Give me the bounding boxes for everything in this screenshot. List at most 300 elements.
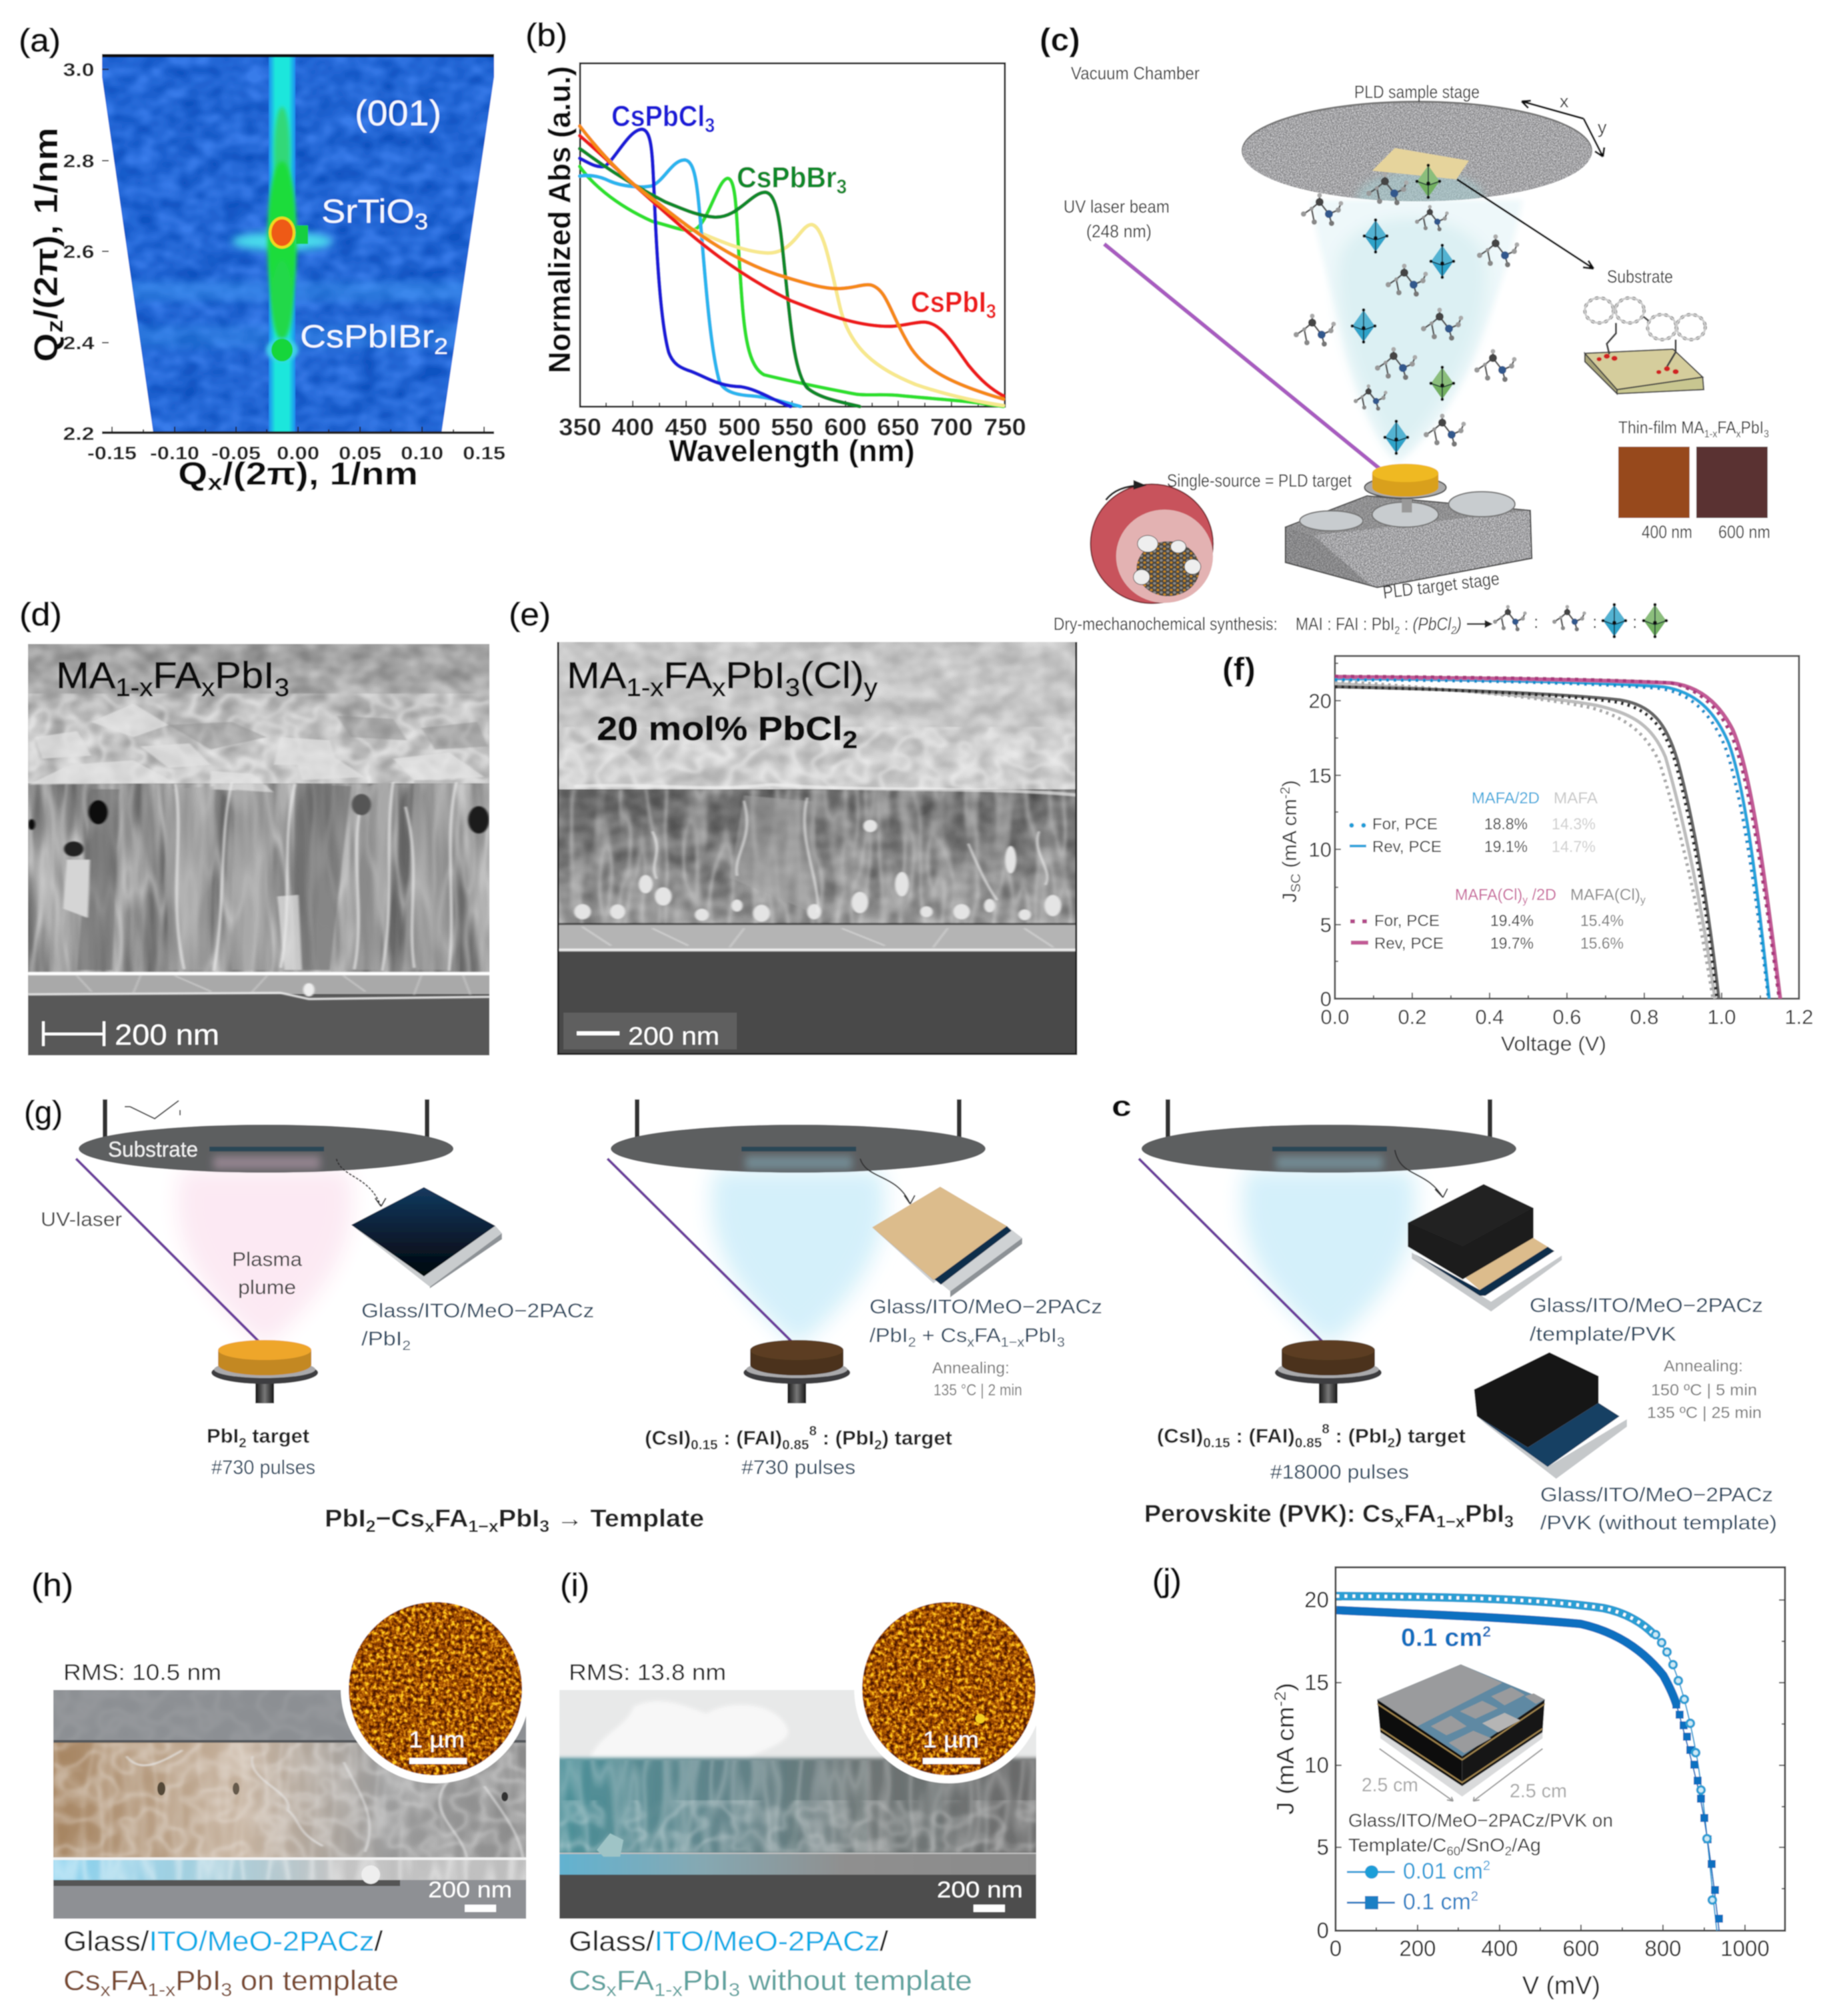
caption h: 1-x	[147, 1979, 175, 2000]
y ticks j: 10	[1304, 1753, 1329, 1777]
y ticks f: 0	[1320, 987, 1332, 1011]
axis title y f: SC	[1289, 873, 1304, 893]
y ticks f: 10	[1309, 838, 1332, 861]
x ticks f: 1.2	[1784, 1005, 1814, 1029]
title e: (Cl)	[800, 654, 864, 696]
title d: 1-x	[115, 674, 153, 702]
ticks b: 400	[611, 413, 654, 441]
step 1 labels: Plasma	[232, 1249, 302, 1271]
step 1 labels: target	[247, 1425, 309, 1447]
step 3 labels: : (FAI)	[1230, 1425, 1295, 1447]
ticks b: 600	[824, 413, 867, 441]
step 2 plume blue	[611, 1099, 986, 1343]
caption i: 1-x	[654, 1979, 683, 2000]
step 2 labels	[645, 1296, 1102, 1479]
step 2 labels: : (FAI)	[717, 1427, 782, 1449]
x ticks f: 0.8	[1630, 1005, 1659, 1029]
title e: 20 mol% PbCl	[597, 710, 817, 747]
thin-film samples: 400 nm	[1642, 522, 1692, 542]
legend f: For, PCE	[1372, 815, 1438, 833]
y ticks j: 5	[1317, 1835, 1329, 1859]
step 3 labels: /template/PVK	[1530, 1323, 1676, 1345]
caption i: x	[606, 1979, 617, 2000]
legend f: 15.4%	[1580, 912, 1624, 930]
panel i: SEM without template	[553, 1568, 1044, 2000]
template caption: PbI	[325, 1505, 363, 1532]
axis title y f: (mA cm	[1279, 799, 1301, 873]
step 3 labels: x	[1394, 1513, 1404, 1531]
dimension labels: 2.5 cm	[1362, 1775, 1418, 1796]
synthesis equation: :	[1592, 612, 1598, 632]
step 3 labels: Glass/ITO/MeO−2PACz	[1530, 1295, 1763, 1317]
axis title x a: Q	[178, 457, 203, 492]
SEM image e	[558, 642, 1081, 1054]
x ticks f	[1320, 1005, 1814, 1029]
axis title y f: J	[1279, 893, 1301, 903]
step 3 labels	[1144, 1295, 1777, 1534]
caption h: FA	[111, 1965, 147, 1996]
title d: 3	[275, 674, 289, 702]
synthesis equation: Dry-mechanochemical synthesis:	[1054, 614, 1278, 634]
ticks b: 450	[665, 413, 707, 441]
y ticks j: 0	[1317, 1918, 1329, 1943]
step 3 labels: Annealing:	[1664, 1357, 1743, 1375]
panel label g: (g)	[24, 1095, 63, 1131]
stage label and axes: y	[1598, 117, 1607, 137]
legend f: y	[1522, 895, 1528, 906]
legend f: 15.6%	[1580, 935, 1624, 953]
ticks b	[559, 413, 1026, 441]
frame b	[580, 63, 1005, 407]
legend f: 14.3%	[1552, 815, 1596, 833]
step 3 labels: 3	[1504, 1513, 1514, 1531]
step 2 labels: 0.85	[782, 1438, 809, 1453]
x ticks j: 600	[1562, 1936, 1600, 1961]
synthesis equation: :	[1632, 612, 1638, 632]
caption h: Cs	[63, 1965, 97, 1996]
synthesis equation: :	[1534, 612, 1539, 632]
step 1 labels: /PbI	[361, 1328, 397, 1350]
substrate callout: Substrate	[1607, 267, 1673, 287]
title e	[567, 654, 877, 753]
scale bar e	[577, 1023, 719, 1051]
step 2 labels: /PbI	[869, 1325, 905, 1347]
synthesis equation	[1054, 603, 1668, 639]
axis title y j: J (mA cm	[1272, 1715, 1299, 1815]
thin-film samples: PbI	[1741, 417, 1764, 437]
axis title x b: Wavelength (nm)	[669, 433, 915, 468]
x ticks j	[1330, 1936, 1770, 1961]
step 3 labels: /PVK (without template)	[1540, 1512, 1777, 1534]
synthesis equation: )	[1455, 614, 1462, 634]
panel label j: (j)	[1152, 1563, 1182, 1599]
legend f: y	[1640, 895, 1646, 906]
legend f: /2D	[1528, 886, 1556, 904]
legend j: 60	[1446, 1845, 1460, 1858]
legend f: 19.7%	[1490, 935, 1534, 953]
step 1 labels: plume	[238, 1277, 296, 1299]
title d: x	[201, 674, 215, 702]
vacuum chamber label: Vacuum Chamber	[1071, 63, 1200, 83]
laser label	[1064, 197, 1170, 241]
AFM inset i	[854, 1594, 1044, 1783]
title e: 2	[843, 726, 857, 753]
title e: x	[712, 674, 725, 702]
axis ticks a: -0.15	[87, 443, 137, 463]
step 2 labels: Annealing:	[932, 1359, 1010, 1377]
curve labels b: CsPbBr	[737, 161, 844, 194]
SEM image h	[53, 1690, 526, 1919]
RMS h: RMS: 10.5 nm	[63, 1660, 221, 1685]
plume c	[1311, 200, 1523, 463]
caption h: PbI	[175, 1965, 221, 1996]
step 3 labels: PbI	[1465, 1500, 1504, 1527]
scale bar i: 200 nm	[937, 1877, 1023, 1903]
caption i: FA	[617, 1965, 654, 1996]
panel label a: (a)	[19, 23, 61, 59]
dimension labels	[1362, 1775, 1567, 1802]
panel label e: (e)	[509, 597, 551, 633]
title e: y	[864, 674, 877, 702]
panel e: SEM cross-section with PbCl2	[509, 597, 1081, 1054]
step 3 labels: 8	[1322, 1422, 1330, 1437]
caption i	[569, 1925, 972, 2000]
step 3 labels: Perovskite (PVK): Cs	[1144, 1500, 1390, 1527]
step 1 labels: UV-laser	[41, 1209, 122, 1231]
AFM inset h	[341, 1594, 530, 1783]
annotations a	[300, 93, 448, 359]
step 2 labels: 0.15	[691, 1438, 717, 1453]
template caption: x	[425, 1517, 435, 1536]
legend f: 18.8%	[1484, 815, 1528, 833]
step 2 labels: 8	[809, 1424, 817, 1439]
step 2 labels: FA	[974, 1325, 1001, 1347]
axis ticks a: -0.10	[150, 443, 199, 463]
thin-film samples: Thin-film MA	[1618, 417, 1716, 437]
synthesis equation: (PbCl	[1413, 614, 1452, 634]
title e: 1-x	[626, 674, 663, 702]
legend j: 0.1 cm	[1403, 1889, 1471, 1915]
axis ticks a: 2.8	[63, 151, 95, 171]
panel label c: (c)	[1040, 23, 1080, 58]
step 1 labels: Glass/ITO/MeO−2PACz	[361, 1300, 594, 1322]
axis ticks a: 0.10	[401, 443, 443, 463]
SEM image d	[28, 644, 491, 1055]
caption h: Glass/ITO/MeO-2PACz /	[63, 1925, 383, 1957]
x ticks f: 0.6	[1552, 1005, 1582, 1029]
step 2 labels: ) target	[882, 1427, 952, 1449]
curves f	[1335, 676, 1780, 999]
axis title y j: -2	[1272, 1691, 1290, 1707]
axis ticks a: 3.0	[63, 59, 95, 80]
scale bar e: 200 nm	[628, 1023, 719, 1051]
stage label and axes	[1354, 82, 1607, 157]
x ticks j: 0	[1330, 1936, 1342, 1961]
panel label i: (i)	[560, 1568, 589, 1603]
scale bar d	[43, 1019, 219, 1051]
legend j: Glass/ITO/MeO−2PACz/PVK on	[1348, 1810, 1613, 1831]
x ticks j: 400	[1481, 1936, 1518, 1961]
panel c: PLD chamber schematic	[1040, 23, 1770, 639]
x ticks f: 0.2	[1398, 1005, 1427, 1029]
step 2 labels: 2	[908, 1335, 916, 1350]
annotations a: CsPbIBr	[300, 319, 419, 355]
legend f: MAFA/2D	[1472, 789, 1540, 807]
axis ticks a: 0.05	[339, 443, 381, 463]
synthesis equation: :	[1400, 614, 1413, 634]
legend f: 19.1%	[1484, 838, 1528, 856]
step 2 labels: + Cs	[916, 1325, 967, 1347]
step 3 labels: 2	[1388, 1436, 1395, 1451]
y ticks f: 15	[1309, 764, 1332, 787]
step 1 labels: PbI	[207, 1425, 238, 1447]
caption h: 3	[221, 1979, 232, 2000]
y ticks f	[1309, 689, 1332, 1011]
legend j: Template/C	[1348, 1835, 1443, 1855]
curve labels b: 3	[837, 176, 847, 198]
step 2 laser	[607, 1159, 796, 1346]
legend j: 2	[1471, 1889, 1478, 1904]
y ticks f: 20	[1309, 689, 1332, 713]
stage label and axes: x	[1560, 91, 1569, 111]
title e: PbI	[725, 654, 785, 696]
title d: PbI	[215, 654, 275, 696]
device cube inset	[1377, 1664, 1545, 1801]
panel b: absorbance chart	[525, 18, 1026, 468]
scale bar h: 200 nm	[428, 1877, 512, 1903]
legend f: MAFA	[1554, 789, 1598, 807]
axis title x a: x	[207, 470, 223, 495]
template caption: 2	[365, 1517, 375, 1536]
template caption: 3	[539, 1517, 549, 1536]
step 2 sample	[860, 1159, 1022, 1297]
target stage	[1280, 464, 1537, 590]
annotations a: 2	[434, 334, 448, 359]
stage label and axes: PLD sample stage	[1354, 82, 1480, 102]
legend f: MAFA(Cl)	[1455, 886, 1524, 904]
panel label f: (f)	[1222, 652, 1256, 687]
axis title y a: Q	[27, 336, 65, 362]
laser beam c	[1104, 244, 1390, 477]
curve labels b: CsPbI	[911, 286, 994, 319]
step 2 labels: 3	[1057, 1335, 1065, 1350]
step 3 labels: 150 ºC | 5 min	[1651, 1381, 1757, 1399]
ticks b: 750	[984, 413, 1026, 441]
title e: 3	[785, 674, 800, 702]
inset scale i: 1 µm	[923, 1727, 979, 1753]
axis ticks a: -0.05	[211, 443, 261, 463]
area callout: 2	[1482, 1623, 1491, 1640]
step 2 labels: (CsI)	[645, 1427, 689, 1449]
legend f: 14.7%	[1552, 838, 1596, 856]
step 1 labels: 2	[239, 1436, 247, 1451]
axis ticks a: 0.00	[277, 443, 319, 463]
curve labels b	[611, 100, 996, 323]
axis title x f: Voltage (V)	[1501, 1032, 1606, 1055]
template caption: PbI	[499, 1505, 539, 1532]
caption i: 3	[729, 1979, 740, 2000]
step 2 labels: : (PbI	[817, 1427, 874, 1449]
x ticks j: 1000	[1720, 1936, 1770, 1961]
heatmap wedge	[87, 53, 513, 437]
synthesis equation: 2	[1394, 624, 1400, 637]
ticks b: 700	[930, 413, 973, 441]
axis title x j: V (mV)	[1522, 1972, 1600, 2000]
step 1 sample	[336, 1159, 502, 1288]
axis ticks a: 2.4	[63, 333, 95, 353]
caption h: on template	[232, 1965, 399, 1996]
curve labels b: CsPbCl	[611, 100, 715, 133]
axis ticks a: 2.2	[63, 423, 95, 444]
synthesis equation: MAI : FAI : PbI	[1296, 614, 1412, 634]
legend f: Rev, PCE	[1374, 935, 1444, 953]
sample stage disc	[1241, 100, 1593, 202]
legend f: MAFA(Cl)	[1570, 886, 1640, 904]
step 3 labels: 0.85	[1295, 1436, 1322, 1451]
panel d: SEM cross-section	[19, 597, 491, 1055]
thin-film samples: FA	[1718, 417, 1736, 437]
template caption: −Cs	[375, 1505, 425, 1532]
target labels: PLD target stage	[1382, 569, 1500, 603]
axis title y a: z	[41, 319, 68, 333]
inset scale h: 1 µm	[409, 1727, 465, 1753]
legend f	[1350, 789, 1646, 953]
scale bar i	[937, 1877, 1023, 1912]
RMS i: RMS: 13.8 nm	[569, 1660, 726, 1685]
thin-film samples: x	[1736, 429, 1741, 440]
x ticks j: 200	[1399, 1936, 1436, 1961]
area callout: 0.1 cm	[1401, 1624, 1480, 1652]
annotations a: SrTiO	[321, 193, 407, 230]
curve labels b: 3	[986, 301, 996, 323]
step 2 labels: Glass/ITO/MeO−2PACz	[869, 1296, 1102, 1318]
curve labels b: 3	[705, 115, 715, 137]
step 1 labels: #730 pulses	[211, 1457, 315, 1479]
step 2 labels: 1−x	[1001, 1335, 1024, 1350]
y ticks f: 5	[1320, 913, 1332, 937]
ticks b: 550	[771, 413, 813, 441]
axis title x a: /(2π), 1/nm	[223, 457, 418, 492]
SEM image i	[553, 1690, 1044, 1919]
annotations a: 3	[414, 209, 428, 235]
step 3 target	[1275, 1340, 1382, 1403]
panel a: reciprocal space map	[19, 23, 513, 495]
scale bar d: 200 nm	[115, 1019, 219, 1051]
ticks b: 650	[877, 413, 920, 441]
axis title y f: )	[1279, 780, 1301, 787]
template caption: → Template	[549, 1505, 704, 1532]
panel f: J-V curves	[1222, 652, 1814, 1055]
ticks b: 500	[718, 413, 761, 441]
legend j: /Ag	[1512, 1835, 1541, 1855]
caption h	[63, 1925, 399, 2000]
scale bar h	[428, 1877, 512, 1912]
laser label: (248 nm)	[1086, 221, 1152, 241]
panel label h: (h)	[31, 1568, 73, 1603]
step 3 labels: 0.15	[1203, 1436, 1230, 1451]
legend j: 2	[1483, 1859, 1490, 1873]
title e: FA	[663, 654, 713, 696]
substrate with molecule	[1585, 298, 1705, 394]
thin-film samples: 3	[1764, 429, 1769, 440]
legend f: For, PCE	[1374, 912, 1440, 930]
step 1 labels	[41, 1209, 594, 1479]
curves j	[1336, 1596, 1723, 1931]
axis title y b: Normalized Abs (a.u.)	[542, 66, 577, 373]
panel j: device J-V curves	[1152, 1563, 1785, 2000]
target labels	[1167, 471, 1500, 603]
target labels: Single-source = PLD target	[1167, 471, 1352, 491]
step 3 labels: (CsI)	[1157, 1425, 1202, 1447]
substrate callout	[1457, 179, 1673, 287]
title d: MA	[56, 654, 112, 696]
step 3 laser	[1139, 1159, 1327, 1346]
step 3 labels: #18000 pulses	[1270, 1461, 1409, 1483]
inset scale h	[409, 1727, 467, 1764]
legend j: 2	[1505, 1845, 1512, 1858]
panel label b: (b)	[525, 18, 567, 53]
caption i: without template	[740, 1965, 972, 1996]
panel h: SEM with template	[31, 1568, 530, 2000]
step 3 plume blue	[1142, 1099, 1516, 1343]
inset scale i	[923, 1727, 980, 1764]
step 1 stage motion icon	[125, 1101, 180, 1119]
legend j	[1347, 1810, 1613, 1915]
step 1 substrate label: Substrate	[108, 1137, 198, 1161]
frame j	[1336, 1567, 1785, 1931]
step 3 labels: ) target	[1395, 1425, 1466, 1447]
frame f	[1335, 656, 1799, 999]
legend f: 19.4%	[1490, 912, 1534, 930]
step 3 labels: : (PbI	[1330, 1425, 1388, 1447]
step 3 labels: 1−x	[1436, 1513, 1465, 1531]
legend f: Rev, PCE	[1372, 838, 1442, 856]
x ticks j: 800	[1644, 1936, 1682, 1961]
laser label: UV laser beam	[1064, 197, 1170, 217]
x ticks f: 0.0	[1320, 1005, 1350, 1029]
annotations a: (001)	[355, 93, 441, 133]
caption i: PbI	[683, 1965, 729, 1996]
step 3 label c: c	[1112, 1090, 1132, 1123]
step 1 labels: 2	[402, 1339, 411, 1353]
step 1 plume pink	[79, 1099, 453, 1343]
x ticks f: 1.0	[1707, 1005, 1736, 1029]
step 3 sample with template	[1395, 1150, 1562, 1311]
panel g: deposition steps	[24, 1090, 1777, 1536]
synthesis equation: 2	[1450, 624, 1457, 637]
step 3 sample without template	[1474, 1352, 1627, 1479]
axis ticks a: 2.6	[63, 241, 95, 262]
step 2 labels: PbI	[1024, 1325, 1057, 1347]
thin-film samples	[1618, 417, 1770, 542]
step 1 target	[211, 1340, 318, 1403]
ticks b: 350	[559, 413, 601, 441]
y ticks j	[1304, 1587, 1329, 1943]
title e: MA	[567, 654, 623, 696]
caption h: x	[100, 1979, 111, 2000]
step 2 labels: 2	[874, 1438, 882, 1453]
axis ticks a	[63, 59, 505, 463]
frame e	[558, 642, 1076, 1054]
dimension labels: 2.5 cm	[1510, 1781, 1567, 1802]
y ticks j: 20	[1304, 1587, 1329, 1612]
step 3 labels: Glass/ITO/MeO−2PACz	[1540, 1484, 1773, 1506]
x ticks f: 0.4	[1475, 1005, 1504, 1029]
caption i: Cs	[569, 1965, 603, 1996]
panel label d: (d)	[19, 597, 62, 633]
title d: FA	[153, 654, 202, 696]
step 1 laser	[76, 1159, 263, 1346]
